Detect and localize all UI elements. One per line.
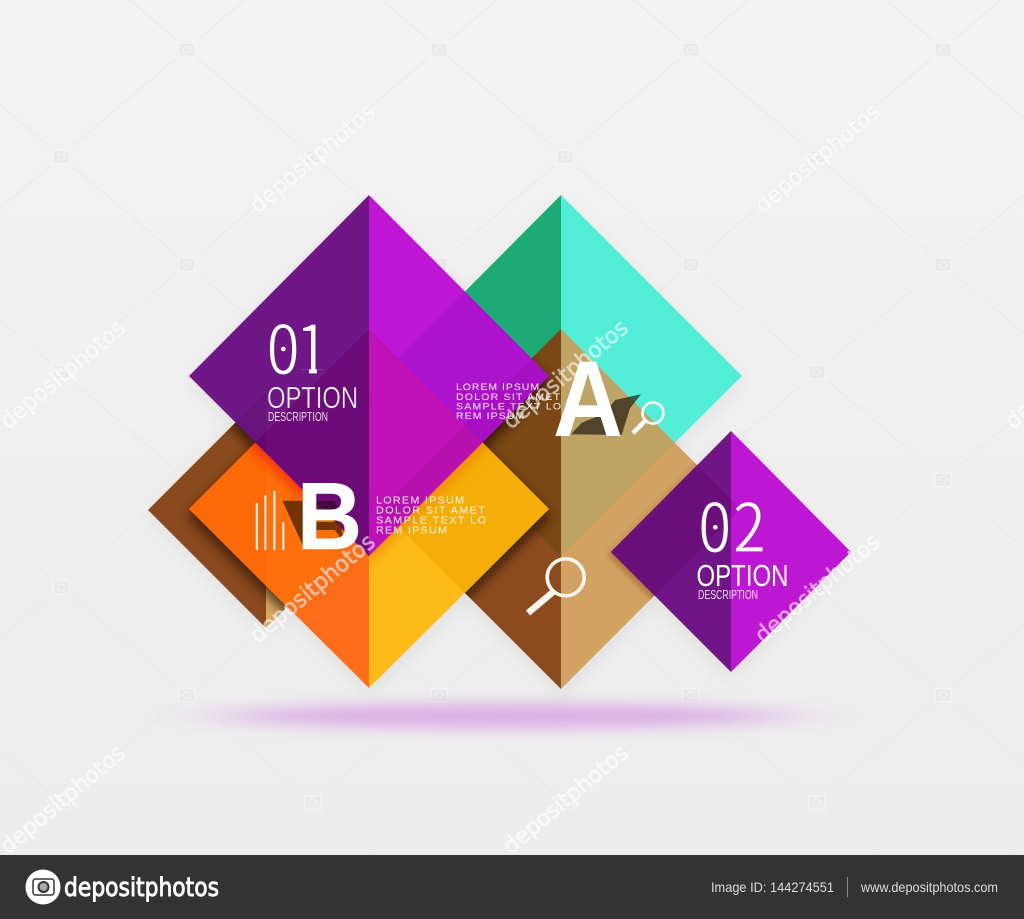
- text block: lorem ipsum A: SAMPLE TEXT LO: [456, 402, 561, 412]
- soft shadow under shapes: [148, 201, 851, 695]
- footer image id: Image ID: 144274551: [711, 879, 834, 895]
- shadow of upper diamonds on brown: [184, 356, 554, 616]
- diamond: teal: [381, 195, 742, 556]
- watermarks: depositphotos: [245, 99, 381, 219]
- footer logo wordmark: depositphotos: [64, 873, 219, 903]
- footer url: www.depositphotos.com: [860, 879, 998, 895]
- watermarks: depositphotos: [498, 740, 634, 860]
- text block: lorem ipsum A: DOLOR SIT AMET: [456, 392, 560, 403]
- text block: lorem ipsum B: SAMPLE TEXT LO: [376, 516, 486, 526]
- text block: 01 option: [268, 324, 356, 421]
- text block: 01 option: 0: [266, 297, 300, 394]
- diamond: purple 02: [611, 431, 851, 672]
- text block: 02 option: OPTION: [696, 559, 788, 593]
- text block: 01 option: DESCRIPTION: [268, 410, 328, 424]
- shadow of purple on orange: [248, 442, 322, 509]
- diamond: orange and yellow: [189, 329, 549, 688]
- footer bar: [0, 855, 1024, 919]
- footer logo icon: [26, 870, 60, 904]
- watermarks: depositphotos: [498, 315, 634, 435]
- icon: bar lines: [256, 491, 284, 550]
- text block: lorem ipsum B: LOREM IPSUM: [376, 496, 464, 506]
- text block: 02 option: [696, 475, 788, 602]
- text block: 01 option: 1: [295, 297, 329, 394]
- diamond: left brown: [148, 392, 384, 628]
- watermarks: depositphotos: [750, 529, 886, 649]
- footer separator: [847, 877, 848, 897]
- icon: small magnifier: [633, 402, 664, 433]
- text block: 02 option: 0: [698, 475, 731, 572]
- diamond: tan: [381, 329, 741, 689]
- text block: 01 option: OPTION: [267, 381, 358, 415]
- icon: letter B with shadow: B: [297, 463, 362, 570]
- text block: 02 option: DESCRIPTION: [698, 588, 758, 602]
- text block: lorem ipsum A: REM IPSUM: [456, 411, 524, 422]
- watermarks: depositphotos: [245, 529, 381, 649]
- text block: lorem ipsum B: REM IPSUM: [376, 526, 447, 536]
- shadow of purple 02 on tan: [608, 464, 697, 600]
- icon: large magnifier: [528, 559, 584, 613]
- shadow of purple on yellow: [369, 442, 488, 564]
- text block: lorem ipsum A: LOREM IPSUM: [456, 382, 539, 393]
- icon: letter A with shadow: A: [553, 338, 623, 459]
- diamond: purple 01: [189, 195, 549, 556]
- text block: lorem ipsum B: DOLOR SIT AMET: [376, 506, 486, 516]
- text block: lorem ipsum A: [456, 382, 561, 422]
- text block: 02 option: 2: [733, 475, 766, 572]
- watermarks: depositphotos: [750, 99, 886, 219]
- text block: lorem ipsum B: [376, 496, 486, 536]
- purple floor shadow: [220, 703, 790, 729]
